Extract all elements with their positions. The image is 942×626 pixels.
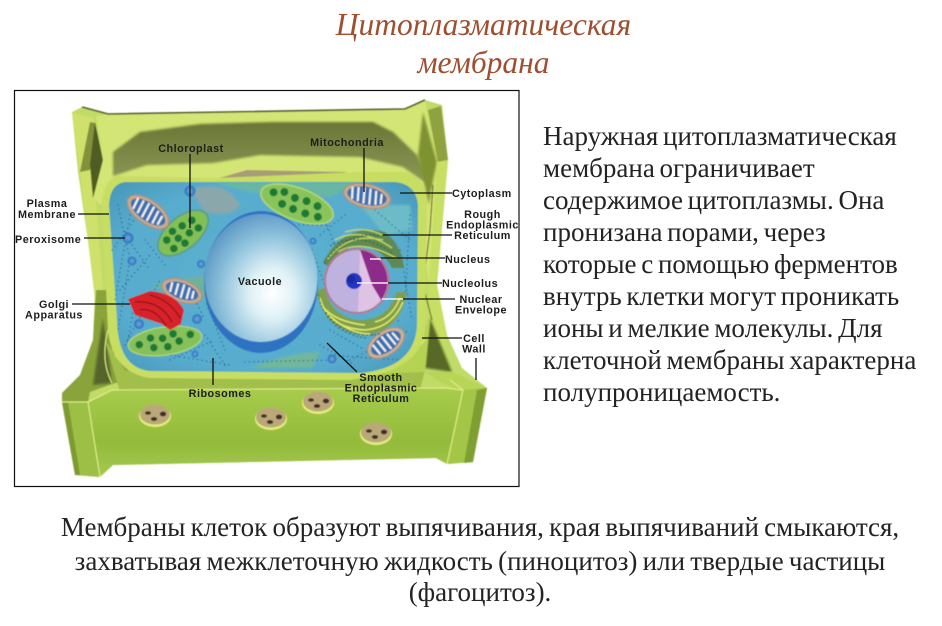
chloroplast lower left xyxy=(126,322,204,360)
lower right dark corner xyxy=(425,318,452,372)
label: Rough Endoplasmic Reticulum: Endoplasmic xyxy=(446,220,519,232)
brown strip xyxy=(216,170,362,180)
rough endoplasmic reticulum xyxy=(317,230,407,338)
front wall right face xyxy=(447,388,487,464)
label: Ribosomes: Ribosomes xyxy=(189,388,251,400)
back wall inner xyxy=(94,100,437,290)
label: Peroxisome: Peroxisome xyxy=(15,234,81,246)
label: Chloroplast: Chloroplast xyxy=(158,143,224,155)
highlight lines xyxy=(62,330,463,477)
title xyxy=(335,7,631,80)
nucleus xyxy=(324,248,390,314)
label: Nucleolus: Nucleolus xyxy=(442,278,498,290)
text block: bottom note: захватывая межклеточную жидкость (пиноцитоз) или твердые частицы xyxy=(75,546,885,576)
labels xyxy=(15,137,519,405)
vacuole xyxy=(204,211,318,353)
olive back surface xyxy=(113,122,433,188)
title: мембрана xyxy=(417,45,550,80)
chloroplast upper right xyxy=(256,176,338,232)
lower left dark corner xyxy=(93,318,112,385)
right corner shading xyxy=(418,112,437,205)
cytoplasm xyxy=(109,182,418,373)
pore xyxy=(302,392,334,414)
text block: membrane description: клеточной мембраны характерна xyxy=(543,345,916,375)
label: Golgi Apparatus: Apparatus xyxy=(25,310,83,322)
label: Rough Endoplasmic Reticulum: Reticulum xyxy=(454,230,511,242)
pore xyxy=(139,404,171,427)
mitochondrion 2 xyxy=(341,179,393,213)
left wall strip xyxy=(72,113,104,300)
label: Smooth Endoplasmic Reticulum: Reticulum xyxy=(353,393,409,405)
label: Nuclear Envelope: Envelope xyxy=(455,304,507,316)
text block: membrane description: внутрь клетки могут проникать xyxy=(543,281,899,311)
label: Cytoplasm: Cytoplasm xyxy=(452,188,512,200)
cell membrane outer light xyxy=(102,172,427,380)
text block: bottom note: Мембраны клеток образуют выпячивания, края выпячиваний смыкаются, xyxy=(61,512,899,542)
title: Цитоплазматическая xyxy=(336,7,631,42)
right strip xyxy=(428,106,448,162)
label: Plasma Membrane: Plasma xyxy=(27,198,68,210)
chloroplast upper left xyxy=(150,201,216,265)
label: Smooth Endoplasmic Reticulum: Smooth xyxy=(359,372,403,384)
text block: membrane description: мембрана ограничивает xyxy=(543,153,815,183)
text block: membrane description: пронизана порами, через xyxy=(543,217,826,247)
ER smooth band xyxy=(250,352,320,368)
leader lines xyxy=(72,148,476,385)
label: Mitochondria: Mitochondria xyxy=(310,137,384,149)
text block: membrane description: полупроницаемость. xyxy=(543,377,780,407)
text block: membrane description: Наружная цитоплазматическая xyxy=(543,121,897,151)
front wall pores xyxy=(139,392,392,445)
label: Vacuole: Vacuole xyxy=(238,276,282,288)
mitochondrion 3 xyxy=(362,321,410,365)
label: Cell Wall: Cell xyxy=(463,333,485,345)
image frame xyxy=(14,90,519,486)
label: Golgi Apparatus: Golgi xyxy=(39,299,69,311)
back wall dark top edge xyxy=(82,100,425,114)
ribosome dots xyxy=(112,205,412,365)
text block: membrane description: ионы и мелкие молекулы. Для xyxy=(543,313,882,343)
label: Rough Endoplasmic Reticulum: Rough xyxy=(464,209,501,221)
text block: membrane description: которые с помощью ферментов xyxy=(543,249,898,279)
mitochondrion 1 xyxy=(121,188,175,236)
mitochondrion 4 xyxy=(159,273,205,309)
label: Nucleus: Nucleus xyxy=(445,254,491,266)
label: Cell Wall: Wall xyxy=(462,344,486,356)
pore xyxy=(360,422,392,445)
left lower block xyxy=(62,290,135,402)
cell wall box xyxy=(62,100,487,477)
front wall left face xyxy=(62,402,100,477)
pore xyxy=(255,408,287,430)
label: Plasma Membrane: Membrane xyxy=(18,209,76,221)
text block: membrane description xyxy=(543,121,916,407)
back and side walls xyxy=(62,100,487,477)
label: Nuclear Envelope: Nuclear xyxy=(459,294,503,306)
golgi apparatus xyxy=(128,291,184,330)
right corner light xyxy=(425,372,487,392)
front wall xyxy=(88,388,463,477)
text block: membrane description: содержимое цитоплазмы. Она xyxy=(543,185,884,215)
text block: bottom note xyxy=(61,512,899,607)
peroxisomes xyxy=(122,186,336,364)
label: Smooth Endoplasmic Reticulum: Endoplasmic xyxy=(345,382,417,394)
lower floor xyxy=(105,340,425,392)
text block: bottom note: (фагоцитоз). xyxy=(409,577,551,607)
